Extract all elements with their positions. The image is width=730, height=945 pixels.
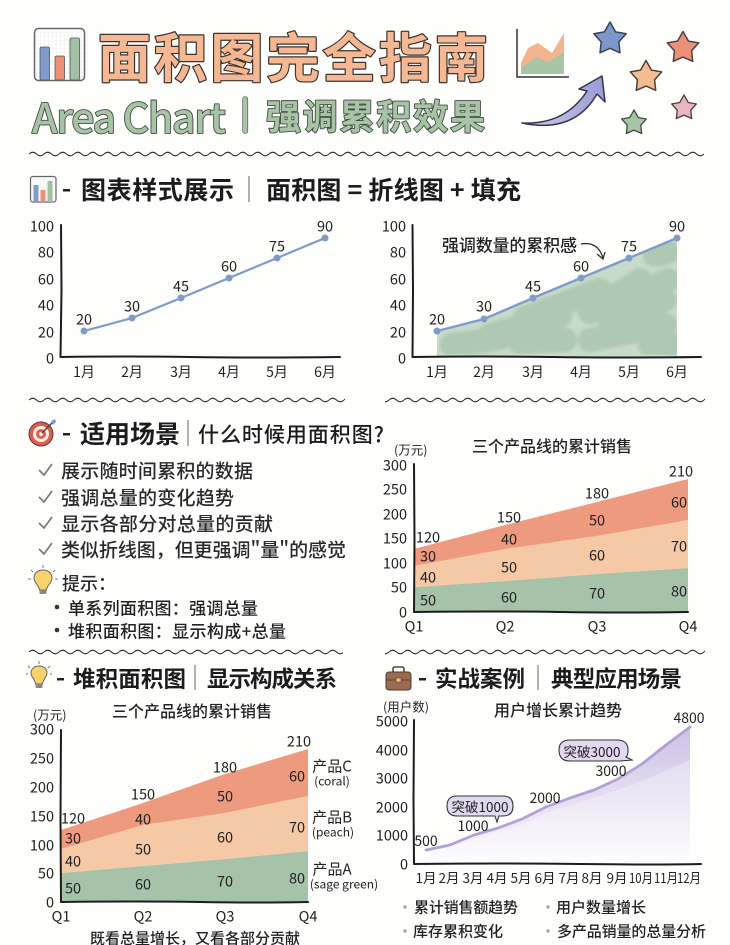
icon: coral star — [667, 32, 699, 61]
checklist — [39, 456, 346, 562]
line chart: 1月 — [73, 362, 95, 382]
stacked chart: bottom left: 70 — [217, 870, 233, 892]
examples list: 累计销售额趋势 — [414, 896, 518, 918]
stacked chart: top right: 40 — [420, 566, 436, 588]
filled area chart: 1月 — [426, 362, 448, 382]
stacked chart: bottom left: 300 — [30, 718, 54, 740]
legend: 产品C — [312, 756, 352, 776]
stacked chart: top right: Q2 — [496, 616, 514, 636]
stacked chart: bottom left: 100 — [30, 834, 54, 856]
icon: blue star — [594, 22, 626, 53]
stacked chart: bottom left: 60 — [217, 826, 233, 848]
stacked chart: top right: (万元) — [394, 440, 427, 458]
stacked chart: bottom left: 40 — [65, 850, 81, 872]
filled area chart: 30 — [476, 296, 492, 316]
callout: 1000 — [447, 796, 513, 822]
stacked chart: bottom left — [30, 698, 378, 926]
user growth chart: (用户数) — [383, 696, 429, 716]
stacked chart: bottom left: 三个产品线的累计销售 — [112, 698, 272, 722]
user growth chart: 2月 — [438, 867, 460, 887]
filled area chart: 6月 — [666, 362, 688, 382]
examples list: 库存累积变化 — [413, 920, 503, 942]
line chart: 60 — [38, 268, 54, 290]
line chart — [30, 216, 340, 382]
filled area chart: 3月 — [522, 362, 544, 382]
filled area chart: 4月 — [570, 362, 592, 382]
user growth chart: 2000 — [376, 796, 408, 818]
stacked chart: bottom left: 250 — [30, 748, 54, 768]
stacked chart: bottom left: 50 — [38, 862, 54, 884]
line chart: 6月 — [314, 362, 336, 382]
user growth chart: 0 — [400, 854, 408, 874]
subtitle — [32, 85, 485, 145]
stacked chart: top right: 70 — [671, 536, 687, 556]
user growth chart: 5月 — [510, 867, 532, 887]
filled area chart: 20 — [390, 322, 406, 342]
examples list — [403, 896, 706, 942]
section heading: case studies: 典型应用场景 — [551, 662, 682, 694]
legend: (sage green) — [310, 876, 378, 892]
user growth chart: 3月 — [462, 867, 484, 887]
stacked chart: top right: 50 — [391, 576, 407, 598]
filled area chart: 100 — [382, 216, 406, 236]
icon: peach star — [630, 60, 662, 90]
annotation: cumulative sense: 强调数量的累积感 — [442, 232, 577, 256]
section heading: use cases — [29, 415, 384, 451]
examples list: 用户数量增长 — [556, 896, 646, 918]
filled area chart: 60 — [573, 256, 589, 276]
stacked chart: bottom left: 60 — [135, 874, 151, 894]
icon: title bar chart — [34, 28, 84, 80]
user growth chart: 5000 — [376, 710, 408, 732]
checklist: 类似折线图，但更强调"量"的感觉 — [61, 536, 346, 562]
stacked chart: bottom left: Q2 — [134, 906, 152, 926]
line chart: 2月 — [121, 362, 143, 382]
user growth chart: 3000 — [595, 761, 627, 781]
legend: (coral) — [314, 772, 350, 790]
line chart: 75 — [269, 236, 285, 256]
section heading: chart styles — [30, 171, 521, 207]
tip block — [28, 565, 286, 642]
line chart: 80 — [38, 242, 54, 262]
stacked chart: bottom left: 40 — [135, 808, 151, 830]
stacked chart: top right: 50 — [420, 590, 436, 610]
user growth chart: 7月 — [558, 867, 580, 887]
section heading: case studies — [386, 662, 682, 694]
stacked chart: bottom left: 70 — [289, 816, 305, 838]
user growth chart: 500 — [414, 831, 438, 851]
subtitle: Area Chart — [32, 85, 226, 145]
line chart: 30 — [124, 296, 140, 316]
filled area chart: 2月 — [473, 362, 495, 382]
line chart: 40 — [38, 294, 54, 316]
filled area chart: 45 — [525, 276, 541, 296]
examples list: 多产品销量的总量分析 — [557, 920, 706, 942]
stacked chart: bottom left: 60 — [289, 766, 305, 786]
stacked chart: bottom left: 200 — [30, 776, 54, 798]
filled area chart: 60 — [390, 268, 406, 290]
user growth chart: 8月 — [582, 867, 602, 887]
stacked chart: top right: 0 — [399, 602, 407, 622]
stacked chart: bottom left: 0 — [46, 892, 54, 912]
stacked chart: top right: 60 — [589, 544, 605, 566]
stacked chart: bottom left: 30 — [65, 828, 81, 848]
stacked chart: top right: 50 — [501, 556, 517, 578]
line chart: 0 — [46, 348, 54, 368]
icon: light bulb small — [26, 661, 52, 688]
section heading: use cases: 什么时候用面积图? — [198, 419, 384, 449]
line chart: 4月 — [218, 362, 240, 382]
callout: 3000: 突破3000 — [564, 741, 620, 761]
user growth chart: 10月 — [629, 867, 653, 887]
user growth chart: 用户增长累计趋势 — [494, 697, 622, 721]
user growth chart: 4000 — [376, 740, 408, 760]
user growth chart: 2000 — [529, 788, 561, 808]
section heading: case studies: 实战案例 — [435, 662, 525, 694]
user growth chart: 3000 — [376, 768, 408, 788]
section heading: stacked area — [26, 661, 337, 694]
stacked chart: top right: Q4 — [679, 616, 697, 636]
icon: pink star — [672, 95, 696, 119]
line chart: 60 — [221, 256, 237, 276]
user growth chart: 11月 — [654, 867, 678, 887]
user growth chart: 12月 — [677, 867, 701, 887]
stacked chart: top right: 30 — [420, 546, 436, 566]
user growth chart: 9月 — [606, 867, 628, 887]
line chart: 20 — [38, 322, 54, 342]
filled area chart: 5月 — [618, 362, 640, 382]
stacked chart: bottom left: 150 — [131, 784, 155, 804]
stacked chart: bottom left: Q4 — [299, 906, 317, 926]
user growth chart: 1000 — [376, 824, 408, 846]
line chart: 5月 — [266, 362, 288, 382]
stacked chart: top right: Q3 — [588, 616, 606, 636]
legend: (peach) — [312, 824, 354, 840]
stacked chart: bottom left: Q3 — [216, 906, 234, 926]
line chart: 3月 — [170, 362, 192, 382]
section heading: stacked area: 显示构成关系 — [207, 662, 337, 694]
icon: mini area chart — [517, 29, 569, 77]
checklist: 展示随时间累积的数据 — [61, 456, 253, 484]
stacked chart: bottom left: 150 — [30, 806, 54, 826]
stacked chart: top right: 70 — [589, 582, 605, 604]
tip block: 提示： — [62, 570, 116, 596]
legend: 产品B — [312, 806, 352, 828]
stacked chart: top right: 100 — [383, 552, 407, 574]
icon: light bulb — [28, 565, 58, 594]
section heading: stacked area: 堆积面积图 — [73, 662, 186, 694]
stacked chart: bottom left: 210 — [287, 730, 311, 752]
subtitle: 强调累积效果 — [266, 90, 485, 140]
stacked chart: top right: Q1 — [405, 616, 423, 636]
stacked chart: top right: 60 — [671, 492, 687, 512]
tip block: 堆积面积图：显示构成+总量 — [68, 618, 286, 642]
legend — [310, 756, 378, 892]
user growth chart — [376, 696, 705, 887]
filled area chart: 80 — [390, 242, 406, 262]
icon: target — [29, 419, 56, 446]
user growth chart: 4月 — [486, 867, 508, 887]
checklist: 强调总量的变化趋势 — [61, 484, 234, 510]
icon: sage star — [622, 110, 646, 134]
filled area chart: 20 — [429, 308, 445, 330]
stacked chart: top right: 300 — [383, 454, 407, 476]
stacked chart: bottom left: (万元) — [33, 704, 66, 724]
stacked chart: bottom left: 180 — [213, 756, 237, 778]
stacked chart: top right: 210 — [669, 460, 693, 482]
user growth chart: 1月 — [416, 867, 436, 887]
line chart: 90 — [317, 216, 333, 236]
user growth chart: 6月 — [534, 867, 556, 887]
tip block: 单系列面积图：强调总量 — [68, 594, 258, 620]
stacked chart: top right: 80 — [671, 580, 687, 602]
filled area chart — [382, 216, 701, 382]
stacked chart: top right: 40 — [501, 528, 517, 550]
stacked chart: bottom left: 50 — [217, 786, 233, 806]
stacked chart: top right: 200 — [383, 504, 407, 524]
arrow: growth — [522, 76, 605, 125]
stacked chart: top right: 120 — [416, 526, 440, 548]
line chart: 100 — [30, 216, 54, 236]
icon: briefcase — [386, 667, 411, 690]
section heading: chart styles: 面积图 = 折线图 + 填充 — [266, 171, 521, 207]
stacked chart: top right: 250 — [383, 478, 407, 500]
stacked chart: top right: 150 — [497, 506, 521, 528]
filled area chart: 90 — [669, 216, 685, 236]
callout: 1000: 突破1000 — [452, 796, 508, 816]
stacked chart: top right — [383, 433, 697, 636]
checklist: 显示各部分对总量的贡献 — [61, 510, 273, 536]
filled area chart: 40 — [390, 294, 406, 316]
section heading: use cases: 适用场景 — [80, 415, 180, 451]
stacked chart: bottom left: 80 — [289, 868, 305, 888]
icon: small bar chart — [30, 176, 56, 202]
user growth chart: 4800 — [673, 708, 705, 728]
stacked chart: top right: 50 — [589, 510, 605, 530]
user growth chart: 1000 — [457, 816, 489, 836]
filled area chart: 0 — [398, 348, 406, 368]
line chart: 45 — [173, 276, 189, 296]
stacked chart: top right: 150 — [383, 528, 407, 548]
stacked chart: bottom left: 50 — [65, 878, 81, 898]
legend: 产品A — [312, 858, 352, 880]
section heading: chart styles: 图表样式展示 — [81, 171, 234, 207]
title: 面积图完全指南 — [98, 17, 488, 93]
stacked chart: bottom left: 120 — [61, 808, 85, 828]
stacked chart: bottom left: 50 — [135, 838, 151, 860]
stacked chart: top right: 180 — [585, 482, 609, 504]
stacked chart: top right: 60 — [501, 586, 517, 608]
filled area chart: 75 — [621, 236, 637, 256]
stacked chart: bottom left: Q1 — [52, 906, 70, 926]
stacked chart: top right: 三个产品线的累计销售 — [472, 433, 632, 457]
line chart: 20 — [76, 308, 92, 330]
